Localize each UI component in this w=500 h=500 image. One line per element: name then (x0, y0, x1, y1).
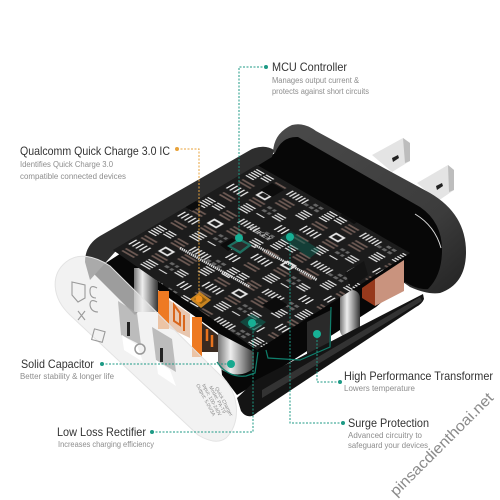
text: solid capacitor: Solid Capacitor (21, 357, 94, 371)
USB port: right (192, 317, 218, 357)
charger body top rim (85, 147, 274, 280)
text: surge protection (348, 416, 429, 450)
lower shell rim (237, 294, 424, 416)
charger rear cap (273, 124, 466, 293)
callout line: MCU controller (235, 65, 268, 242)
text: solid capacitor: Better stability & longer life (20, 372, 115, 381)
text: Quick Charge IC: compatible connected devices (20, 172, 126, 181)
capacitor: right (340, 290, 360, 338)
text: surge protection: Advanced circuitry to (348, 431, 423, 440)
text: MCU controller: MCU Controller (272, 60, 347, 74)
plate printed specifications: Input: 100-240V (200, 383, 223, 418)
copper transformer block (362, 260, 404, 306)
callout line: low loss rectifier (150, 319, 256, 434)
text: MCU controller (272, 60, 369, 96)
board brand text: AUKEY (245, 225, 275, 242)
text: transformer (344, 369, 493, 393)
text: surge protection: Surge Protection (348, 416, 429, 430)
lower shell dark edge (262, 297, 422, 398)
teal capacitor outline (217, 352, 258, 376)
cap inner highlight (415, 214, 441, 248)
transparent front plate (55, 256, 236, 441)
text: low loss rectifier: Increases charging efficiency (58, 440, 154, 449)
watermark: pinsacdienthoai.net (387, 389, 498, 500)
capacitor: large (218, 333, 254, 375)
text: low loss rectifier (57, 425, 154, 449)
charger interior (92, 137, 442, 395)
callout line: solid capacitor (100, 360, 235, 368)
circuit board (113, 165, 410, 350)
callout line: Quick Charge IC (175, 147, 202, 302)
text: Quick Charge IC (20, 144, 170, 181)
plate USB openings (118, 301, 176, 386)
text: Quick Charge IC: Identifies Quick Charge 3.0 (20, 160, 114, 169)
text: surge protection: safeguard your devices (348, 441, 428, 450)
chip: rectifier (240, 314, 266, 332)
plate printed specifications (194, 383, 234, 418)
text: solid capacitor (20, 357, 115, 381)
callout line: transformer (313, 330, 342, 384)
board components pattern (115, 169, 407, 348)
text: low loss rectifier: Low Loss Rectifier (57, 425, 146, 439)
capacitor: left (134, 268, 158, 312)
text: MCU controller: protects against short circuits (272, 87, 369, 96)
icon: charger plug pins (372, 138, 454, 201)
chip: MCU controller (227, 238, 252, 254)
board white strips (180, 245, 317, 287)
plate printed specifications: Model: PA-T9 (207, 385, 227, 415)
callout line: surge protection (286, 233, 345, 425)
black chip on board edge (345, 261, 368, 288)
USB port: left (158, 291, 190, 338)
plate printed specifications: Quick Charger (213, 386, 234, 418)
text: MCU controller: Manages output current & (272, 76, 360, 85)
text: transformer: Lowers temperature (344, 384, 416, 393)
board black chips (186, 183, 356, 313)
teal transformer outline (266, 307, 331, 360)
chip: surge protection (280, 231, 320, 258)
chip: Quick Charge IC (190, 292, 211, 308)
plate regulatory marks (72, 282, 105, 342)
text: Quick Charge IC: Qualcomm Quick Charge 3.0 IC (20, 144, 170, 158)
plate printed specifications: Output: 5.0V/3A (194, 383, 217, 418)
transformer core (307, 310, 331, 360)
